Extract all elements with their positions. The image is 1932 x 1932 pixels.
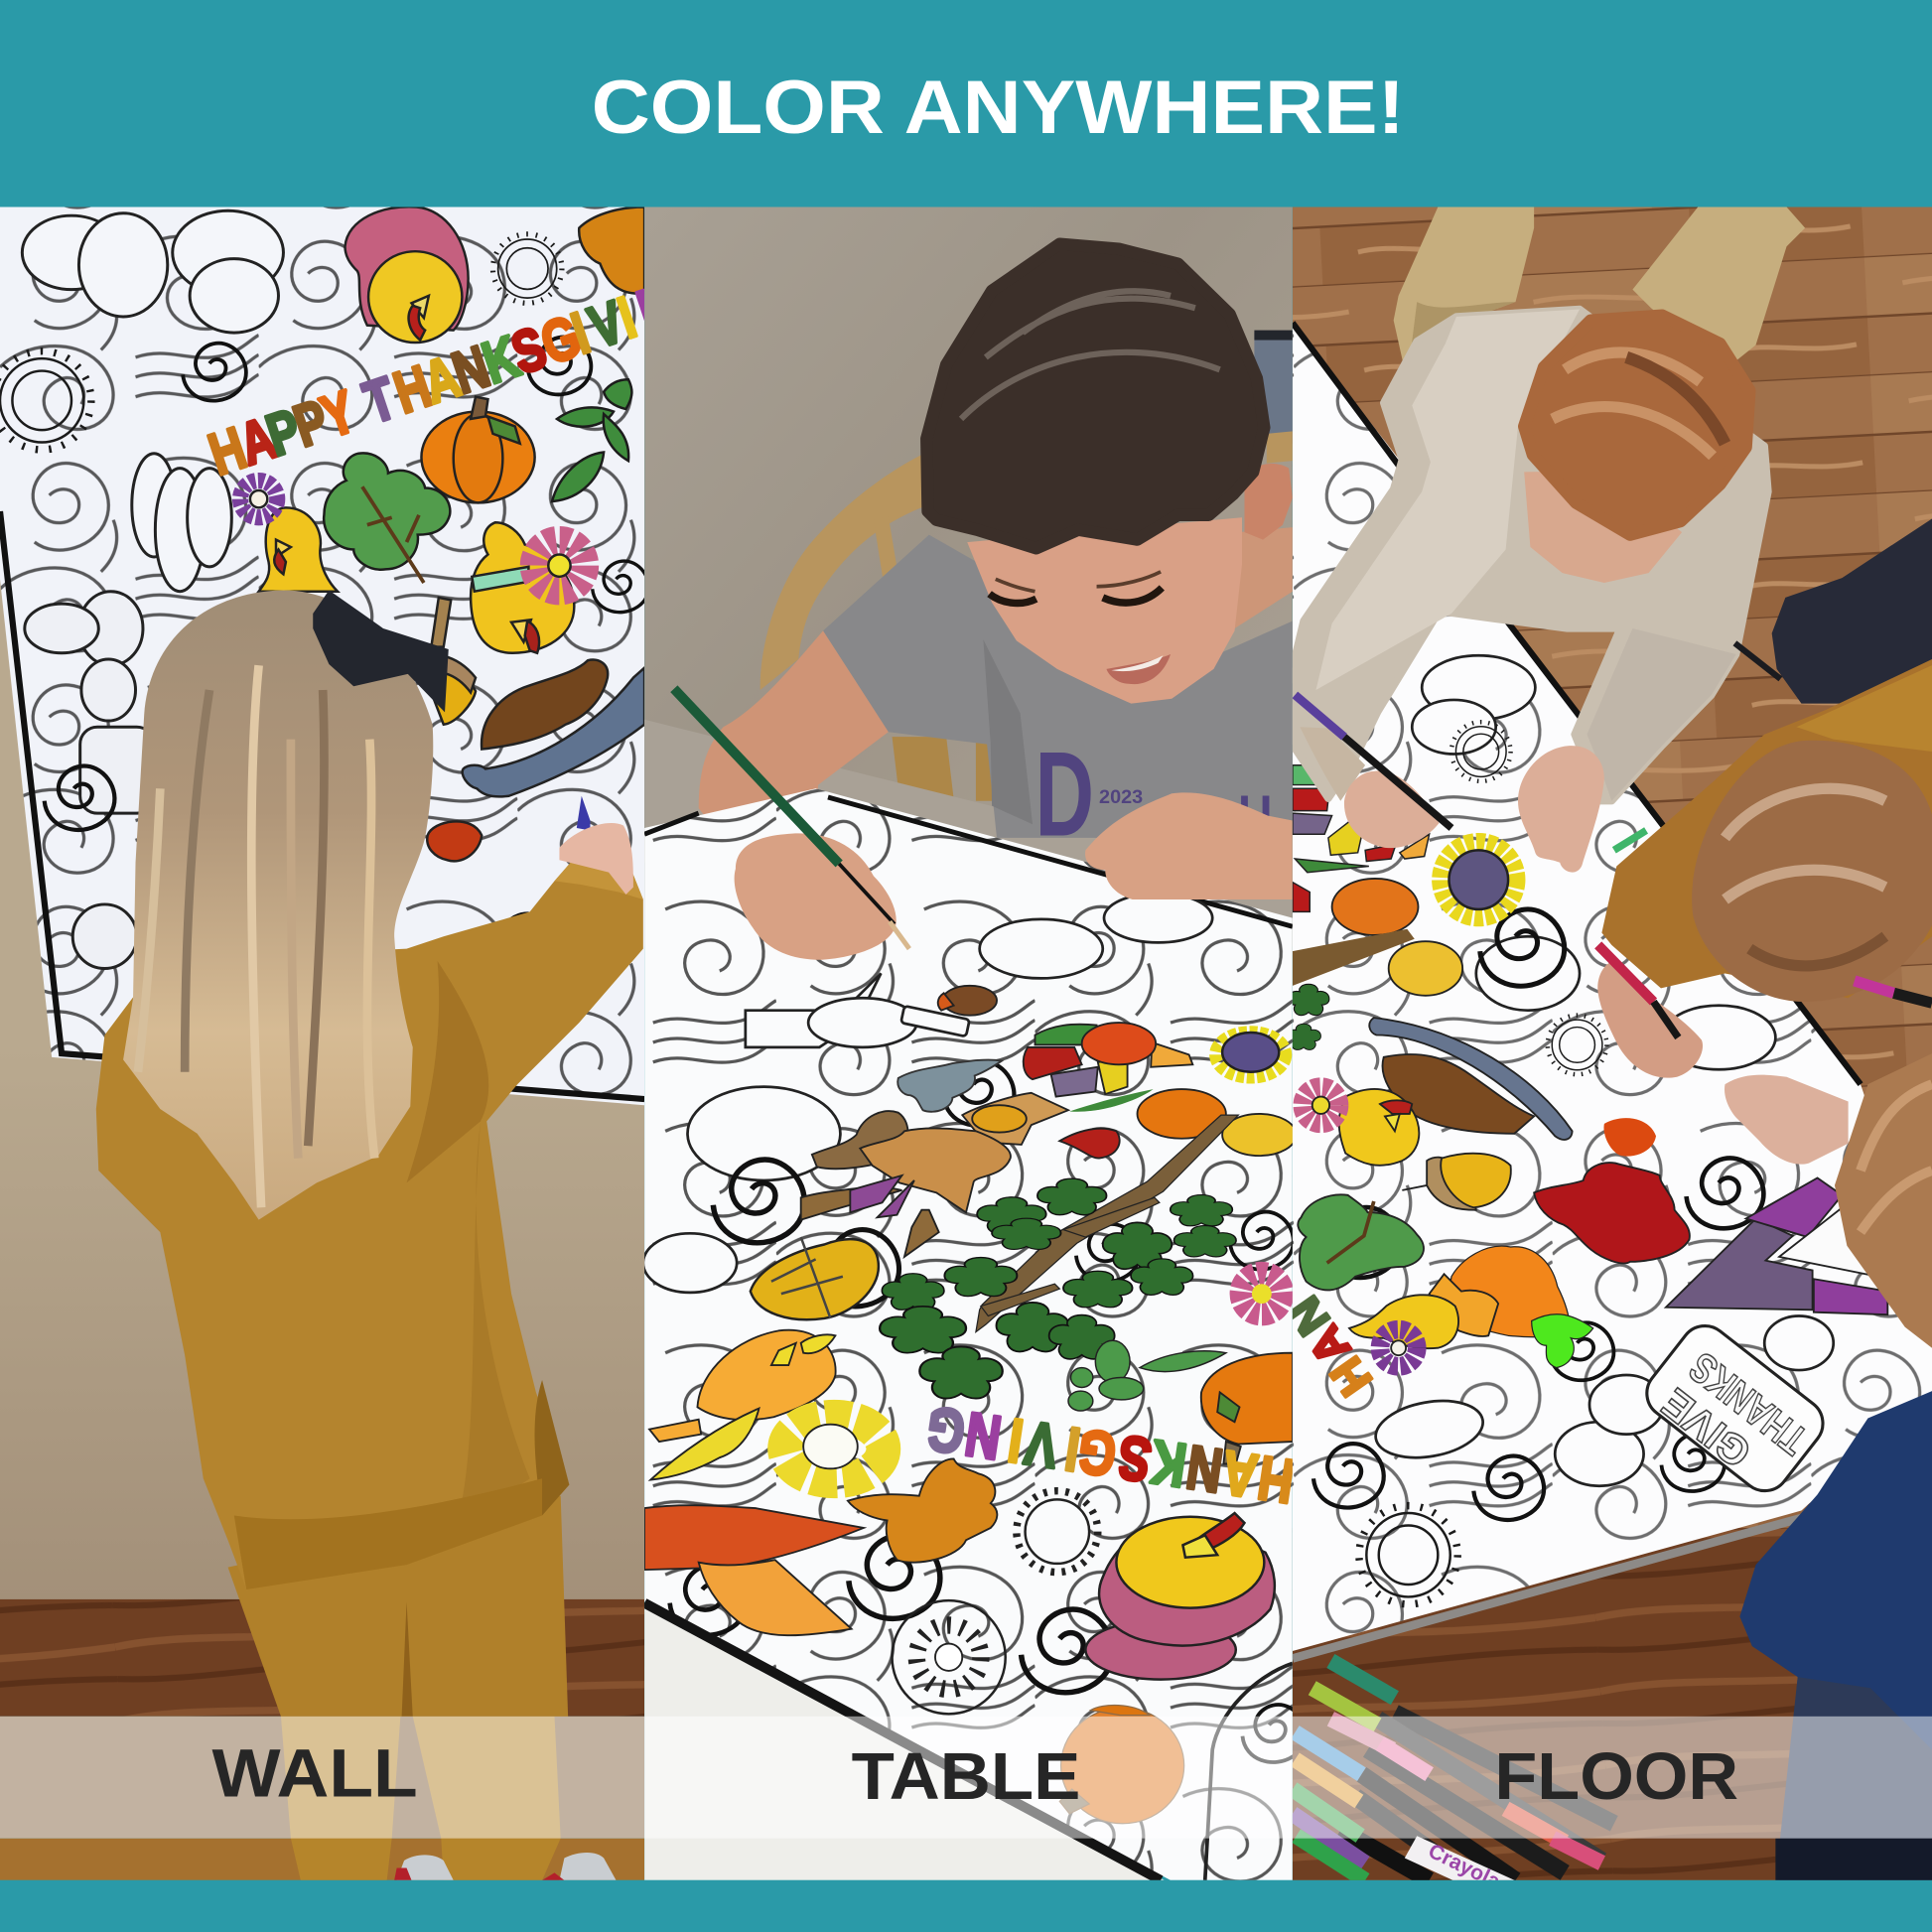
happy thanksgiving lettering: V (582, 289, 631, 361)
upside-down thanksgiving lettering: N (961, 1399, 1006, 1472)
pumpkin (421, 397, 535, 502)
pink hat turkey (1085, 1513, 1275, 1680)
outline corn (132, 454, 231, 592)
colored turkey fragments (1293, 765, 1430, 911)
boy two hair (1692, 741, 1932, 1002)
marker label backing (1405, 1836, 1553, 1915)
happy thanksgiving lettering: G (533, 304, 588, 377)
sunflower (1217, 1033, 1284, 1075)
branch (976, 1115, 1238, 1332)
white table surface (644, 1606, 1165, 1880)
autumn leaf top (579, 207, 644, 294)
red orange feather (644, 1505, 864, 1635)
colored turkey (1024, 1023, 1192, 1097)
outline figure bottom right (1205, 1663, 1293, 1880)
upside-down thanksgiving lettering: V (1021, 1408, 1062, 1481)
orange pumpkin (1450, 1246, 1570, 1337)
long green leaf (1069, 1089, 1154, 1112)
boy three jeans (1775, 1677, 1932, 1880)
happy thanksgiving lettering (207, 288, 645, 477)
give thanks badge (1637, 1316, 1833, 1501)
boy arm (699, 630, 889, 866)
boy one legs (1394, 207, 1805, 380)
outline figures on table poster (643, 894, 1212, 1293)
happy thanksgiving lettering: H (202, 416, 254, 488)
happy thanksgiving lettering: K (475, 324, 527, 397)
upside-down thanksgiving lettering: G (922, 1394, 969, 1467)
happy thanksgiving lettering: H (386, 353, 439, 426)
happy thanksgiving lettering: N (445, 335, 497, 407)
happy thanksgiving lettering: P (259, 397, 309, 469)
translucent label band (0, 1717, 1932, 1839)
outline sunflowers (0, 234, 562, 450)
apple (427, 821, 482, 861)
coloring poster on table (643, 788, 1306, 1880)
happy thanksgiving lettering: I (611, 285, 643, 351)
outline figures on floor poster (1371, 655, 1834, 1486)
green small leaves (1287, 984, 1329, 1049)
deer (801, 1128, 1011, 1257)
acorn (431, 596, 477, 727)
upside-down lettering: H (1319, 1348, 1382, 1406)
orange maple leaf (848, 1458, 997, 1563)
happy thanksgiving lettering: N (630, 272, 682, 345)
give thanks badge: GIVE (1653, 1380, 1759, 1477)
wooden chair (760, 431, 1293, 801)
pumpkin and fruit (1059, 1089, 1297, 1159)
girl pants (228, 1496, 568, 1880)
boy one sweater (1288, 310, 1768, 801)
green leaf (1298, 1194, 1424, 1290)
pilgrim hat (812, 1111, 908, 1169)
upside-down thanksgiving lettering: K (1147, 1427, 1190, 1500)
table (644, 720, 1293, 955)
happy thanksgiving lettering: I (564, 301, 598, 366)
orange pumpkin right (1201, 1353, 1293, 1463)
dark pants at right (1734, 518, 1932, 704)
upside-down thanksgiving lettering: I (1004, 1406, 1028, 1475)
lighter green leaves (1068, 1340, 1226, 1411)
small green leaves (552, 379, 631, 501)
upside-down thanksgiving lettering: G (1073, 1416, 1121, 1489)
crayon (577, 796, 590, 830)
pink marker at right (1855, 981, 1932, 1003)
boy one hands (1344, 746, 1604, 873)
boy two hand and marker (1597, 945, 1849, 1165)
shoes (394, 1853, 617, 1880)
pencil (674, 689, 909, 949)
small bird (938, 986, 997, 1016)
shirt print: D (1035, 726, 1094, 861)
orange chick (649, 1330, 836, 1480)
label: floor: FLOOR (1494, 1739, 1738, 1814)
bunny (962, 1093, 1068, 1145)
happy thanksgiving lettering: S (504, 316, 554, 387)
upside-down lettering (1277, 1288, 1382, 1406)
red apple (1603, 1118, 1656, 1157)
green marker tip (1614, 830, 1646, 850)
upside-down thanksgiving lettering: H (1254, 1444, 1299, 1516)
shirt print: U (1238, 785, 1272, 838)
shirt print: 2023 (1099, 786, 1143, 808)
upside-down lettering: A (1298, 1316, 1360, 1374)
girl sweater (96, 853, 643, 1589)
upside-down thanksgiving lettering: A (1217, 1438, 1262, 1511)
decorative swirls floor (1313, 909, 1763, 1520)
roast turkey in pan (463, 660, 644, 796)
turkey with pink hat (345, 207, 469, 343)
decorative swirls table (670, 1061, 1306, 1762)
panel: wall photo (0, 207, 682, 1880)
brown branch (1293, 929, 1415, 986)
yellow chick small (240, 481, 338, 592)
boy hair (926, 244, 1264, 548)
pink flower (1242, 1274, 1282, 1313)
upside-down lettering: N (1277, 1288, 1339, 1345)
boy three hair (1835, 1053, 1932, 1348)
purple arrow shape (1666, 1177, 1887, 1314)
boy shirt (823, 535, 1293, 861)
yellow chick with flower (471, 522, 586, 653)
boy three shirt (1739, 1391, 1932, 1880)
pumpkin on the table edge (1059, 1706, 1184, 1824)
upside-down thanksgiving lettering (922, 1394, 1299, 1516)
boy one face (1524, 471, 1682, 583)
acorn (1402, 1154, 1511, 1210)
boy face (967, 517, 1242, 704)
dark lower jeans (1775, 1839, 1932, 1880)
bright green leaf (1532, 1314, 1593, 1368)
coloring poster on floor (1277, 323, 1932, 1658)
poster edge (644, 1603, 1161, 1880)
give thanks badge: THANKS (1681, 1343, 1816, 1463)
outline owls (22, 210, 283, 333)
yellow flower (785, 1417, 884, 1481)
dark object behind boy (1254, 331, 1293, 444)
big green leaf (324, 453, 450, 583)
chick with flower (1303, 1087, 1419, 1166)
label: table: TABLE (852, 1739, 1080, 1814)
panel: floor photo (1277, 207, 1932, 1915)
upside-down thanksgiving lettering: I (1061, 1414, 1084, 1484)
happy thanksgiving lettering: A (231, 406, 284, 479)
white flower (893, 1600, 1006, 1714)
happy thanksgiving lettering: T (356, 365, 404, 437)
boy arm forearm and hands (735, 792, 1293, 960)
outline sun flower (1017, 1491, 1098, 1573)
roast and pan (1369, 1018, 1573, 1140)
boy neck and ear (1231, 464, 1293, 630)
hair bow (313, 590, 449, 712)
girl hair (123, 590, 433, 1220)
markers (1293, 1661, 1614, 1915)
eyes and mouth (990, 572, 1171, 684)
green leaves on branch (880, 1178, 1236, 1399)
happy thanksgiving lettering: Y (314, 379, 363, 451)
orange pumpkins (1332, 879, 1462, 996)
blue leaf (897, 1060, 1002, 1112)
marker in hand (1295, 695, 1451, 828)
outline flowers on floor poster (1359, 722, 1606, 1604)
coloring poster on wall (0, 207, 682, 1105)
happy thanksgiving lettering: A (416, 345, 468, 417)
header band (0, 0, 1932, 207)
marker brand label: Crayola (1425, 1840, 1504, 1894)
title: COLOR ANYWHERE! (592, 66, 1405, 150)
upside-down thanksgiving lettering: N (1182, 1433, 1227, 1505)
panel: table photo (643, 207, 1306, 1880)
sunflower (1441, 842, 1517, 918)
label: wall: WALL (211, 1735, 418, 1811)
chick small (1349, 1274, 1498, 1366)
boy one hair (1524, 316, 1749, 535)
shirt print (1035, 726, 1272, 861)
happy thanksgiving lettering: P (286, 388, 337, 460)
outline turkey and badge (25, 592, 154, 968)
upside-down thanksgiving lettering: S (1114, 1422, 1156, 1495)
footer band (0, 1880, 1932, 1932)
boy two shirt (1601, 659, 1932, 998)
decorative swirls wall (45, 337, 648, 978)
red maple leaf (1534, 1163, 1690, 1263)
gold leaf (751, 1237, 879, 1319)
girl hand (559, 823, 633, 895)
